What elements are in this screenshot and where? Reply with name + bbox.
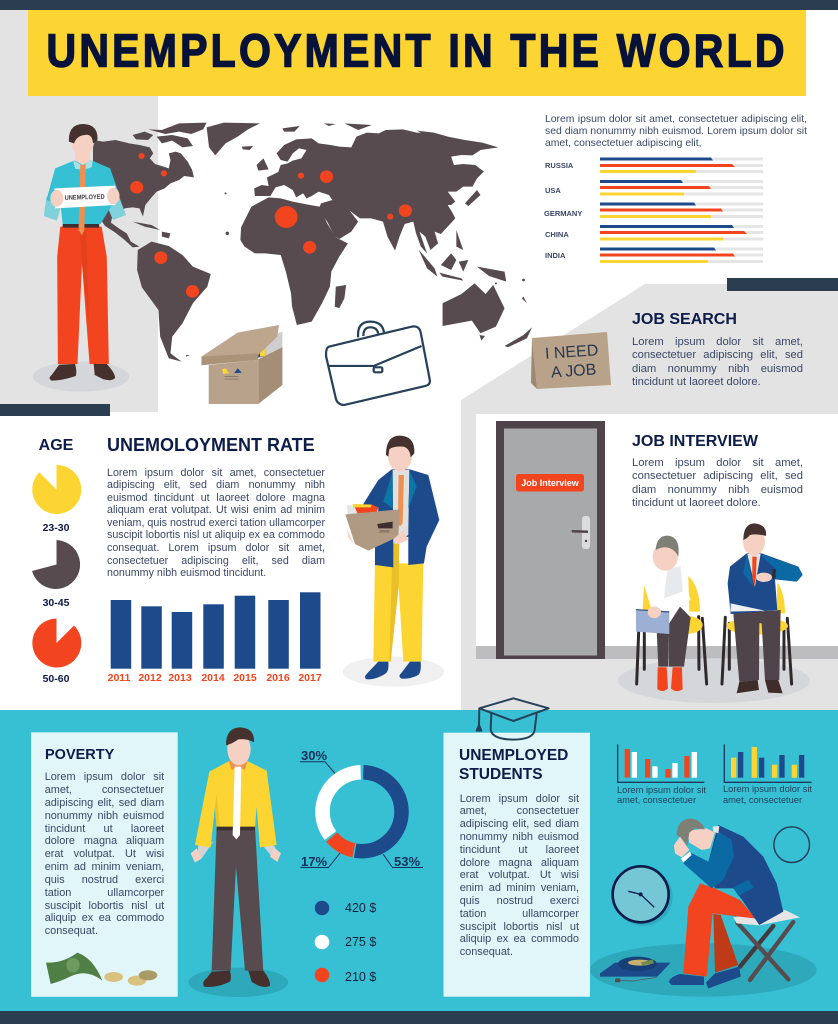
paragraph: job interview: tincidunt ut laoreet dolore. <box>632 497 761 509</box>
paragraph: unemployed students: Lorem ipsum dolor sit <box>460 793 579 805</box>
paragraph: job search <box>632 336 803 388</box>
paragraph: poverty: dolore magna aliquam <box>45 835 164 847</box>
paragraph: unemployed students: tation ullamcorper <box>460 908 579 920</box>
label: India: INDIA <box>545 251 565 260</box>
paragraph: poverty <box>44 771 164 937</box>
icon: graduation cap <box>477 698 549 740</box>
heading: unemployed students <box>459 747 568 783</box>
mini bar chart: yellow and blue <box>724 744 812 782</box>
paragraph: unemployment rate: consequat. Lorem ipsum dolor sit amet, <box>107 542 325 554</box>
paragraph: unemployed students: amet, consectetuer <box>460 805 579 817</box>
heading: unemoloyment rate: UNEMOLOYMENT RATE <box>107 435 315 455</box>
heading: job interview: JOB INTERVIEW <box>632 432 758 450</box>
icon: banknote and coins <box>46 953 157 986</box>
label: Germany: GERMANY <box>544 209 582 218</box>
label: China: CHINA <box>545 230 569 239</box>
caption: second mini chart: Lorem ipsum dolor sit <box>723 784 812 794</box>
year labels: 2015 <box>233 672 257 684</box>
paragraph: unemployment rate <box>107 466 325 579</box>
paragraph: poverty: aliquip ex ea commodo <box>45 912 164 924</box>
heading: poverty: POVERTY <box>45 747 114 763</box>
paragraph: intro above country chart: amet, consectetuer adipiscing elit, <box>545 138 702 149</box>
man with empty pockets <box>188 727 288 997</box>
unemployment rate bar chart <box>111 592 320 669</box>
label: USA: USA <box>545 186 561 195</box>
heading: age: AGE <box>39 437 73 454</box>
year labels: 2012 <box>138 672 162 684</box>
country bar chart <box>600 158 763 263</box>
paragraph: unemployment rate: euismod tincidunt ut laoreet dolore magna <box>107 492 325 504</box>
paragraph: unemployed students: adipiscing elit, sed diam <box>460 818 579 830</box>
paragraph: job search: tincidunt ut laoreet dolore. <box>632 376 761 388</box>
panel: unemployed students <box>444 733 590 997</box>
legend: 420 $: 420 $ <box>345 901 376 915</box>
paragraph: poverty: amet, consectetuer <box>45 784 164 796</box>
paragraph: unemployed students: quis nostrud exerci <box>460 895 579 907</box>
paragraph: poverty: nonummy nibh euismod <box>45 810 164 822</box>
donut legend dots <box>315 901 329 982</box>
paragraph: poverty: tincidunt ut laoreet <box>45 823 164 835</box>
title banner: UNEMPLOYMENT IN THE WORLD <box>46 27 784 77</box>
donut chart <box>300 762 423 868</box>
label: 23-30: 23-30 <box>43 522 69 534</box>
label: 30-45: 30-45 <box>43 597 69 609</box>
caption: first mini chart <box>617 784 706 805</box>
paragraph: job interview: Lorem ipsum dolor sit amet, <box>632 457 803 469</box>
icon: briefcase outline <box>326 322 430 405</box>
mini bar chart: red and white <box>618 744 704 782</box>
paragraph: unemployed students: enim ad minim veniam, <box>460 882 579 894</box>
year labels: 2011 <box>108 672 130 684</box>
year labels: 2016 <box>266 672 290 684</box>
paragraph: poverty: consequat. <box>45 925 98 937</box>
heading: unemployed students: STUDENTS <box>459 766 543 783</box>
door with job interview plate <box>496 421 605 659</box>
paragraph: unemployment rate: veniam, quis nostrud exerci tation ullamcorper <box>107 517 325 529</box>
paragraph: unemployment rate: suscipit lobortis nisl ut aliquip ex ea commodo <box>107 529 325 541</box>
icon: cardboard box <box>201 325 282 404</box>
caption: first mini chart: Lorem ipsum dolor sit <box>617 784 706 794</box>
donut label 17%: 17% <box>301 854 327 868</box>
world map <box>93 123 532 362</box>
paragraph: poverty: enim ad minim veniam, <box>45 861 164 873</box>
man carrying box <box>343 436 444 687</box>
label: Russia: RUSSIA <box>545 161 573 170</box>
paragraph: intro above country chart: Lorem ipsum dolor sit amet, consectetuer adipiscing elit, <box>545 114 807 124</box>
paragraph: intro above country chart <box>545 114 807 149</box>
year labels: 2013 <box>168 672 192 684</box>
label: 50-60: 50-60 <box>43 673 69 685</box>
paragraph: unemployment rate: nonummy nibh euismod tincidunt. <box>107 567 266 579</box>
icon: wall clock <box>613 866 673 926</box>
year labels <box>108 672 322 684</box>
legend: 275 $: 275 $ <box>345 935 376 949</box>
paragraph: poverty: suscipit lobortis nisl ut <box>45 900 164 912</box>
age pie: 50-60 <box>32 618 81 667</box>
icon: I need a job sign: A JOB <box>550 361 597 382</box>
paragraph: unemployed students: dolore magna aliquam <box>460 857 579 869</box>
paragraph: poverty: tation ullamcorper <box>45 887 164 899</box>
paragraph: unemployment rate: consectetuer adipiscing elit, sed diam <box>107 555 325 567</box>
paragraph: unemployed students: suscipit lobortis nisl ut <box>460 921 579 933</box>
caption: second mini chart: amet, consectetuer <box>723 795 802 805</box>
heading: job search: JOB SEARCH <box>632 310 737 328</box>
paragraph: poverty: quis nostrud exerci <box>45 874 164 886</box>
paragraph: unemployed students: consequat. <box>460 946 513 958</box>
year labels: 2017 <box>298 672 322 684</box>
caption: second mini chart <box>723 784 812 805</box>
paragraph: job interview: consectetuer adipiscing elit, sed <box>632 470 803 482</box>
paragraph: unemployed students: nonummy nibh euismod <box>460 831 579 843</box>
door with job interview plate: Job Interview <box>521 478 580 488</box>
paragraph: job search: consectetuer adipiscing elit, sed <box>632 349 803 361</box>
icon: empty circle outline <box>774 827 810 862</box>
paragraph: unemployment rate: adipiscing elit, sed diam nonummy nibh <box>107 479 325 491</box>
paragraph: poverty: Lorem ipsum dolor sit <box>45 771 164 783</box>
despairing man on stool <box>590 819 817 997</box>
paragraph: poverty: adipiscing elit, sed diam <box>45 797 164 809</box>
icon: I need a job sign: I NEED <box>544 342 599 363</box>
icon: I need a job sign <box>531 332 611 389</box>
paragraph: intro above country chart: sed diam nonummy nibh euismod. Lorem ipsum dolor sit <box>545 126 807 137</box>
paragraph: unemployment rate: aliquam erat volutpat. Ut wisi enim ad minim <box>107 504 325 516</box>
paragraph: poverty: erat volutpat. Ut wisi <box>45 848 164 860</box>
paragraph: job interview <box>632 457 803 509</box>
paragraph: unemployed students <box>460 793 579 958</box>
two candidates waiting on chairs <box>618 523 810 703</box>
donut label 30%: 30% <box>301 748 327 762</box>
paragraph: unemployed students: aliquip ex ea commodo <box>460 933 579 945</box>
legend: 210 $: 210 $ <box>345 970 376 984</box>
paragraph: job search: Lorem ipsum dolor sit amet, <box>632 336 803 348</box>
title banner <box>28 10 806 96</box>
paragraph: unemployment rate: Lorem ipsum dolor sit amet, consectetuer <box>107 466 325 478</box>
paragraph: unemployed students: tincidunt ut laoreet <box>460 844 579 856</box>
paragraph: job interview: diam nonummy nibh euismod <box>632 484 803 496</box>
donut label 53%: 53% <box>394 854 420 868</box>
age pie: 30-45 <box>32 540 80 589</box>
heading: unemployed students: UNEMPLOYED <box>459 747 568 764</box>
caption: first mini chart: amet, consectetuer <box>617 795 696 805</box>
age pie: 23-30 <box>32 465 81 514</box>
panel: poverty <box>31 732 178 997</box>
paragraph: unemployed students: erat volutpat. Ut wisi <box>460 869 579 881</box>
icon: hat on floor with coins <box>600 957 671 982</box>
man holding unemployed sign <box>33 124 129 392</box>
man holding unemployed sign: UNEMPLOYED <box>65 194 105 202</box>
paragraph: job search: diam nonummy nibh euismod <box>632 363 803 375</box>
year labels: 2014 <box>201 672 225 684</box>
